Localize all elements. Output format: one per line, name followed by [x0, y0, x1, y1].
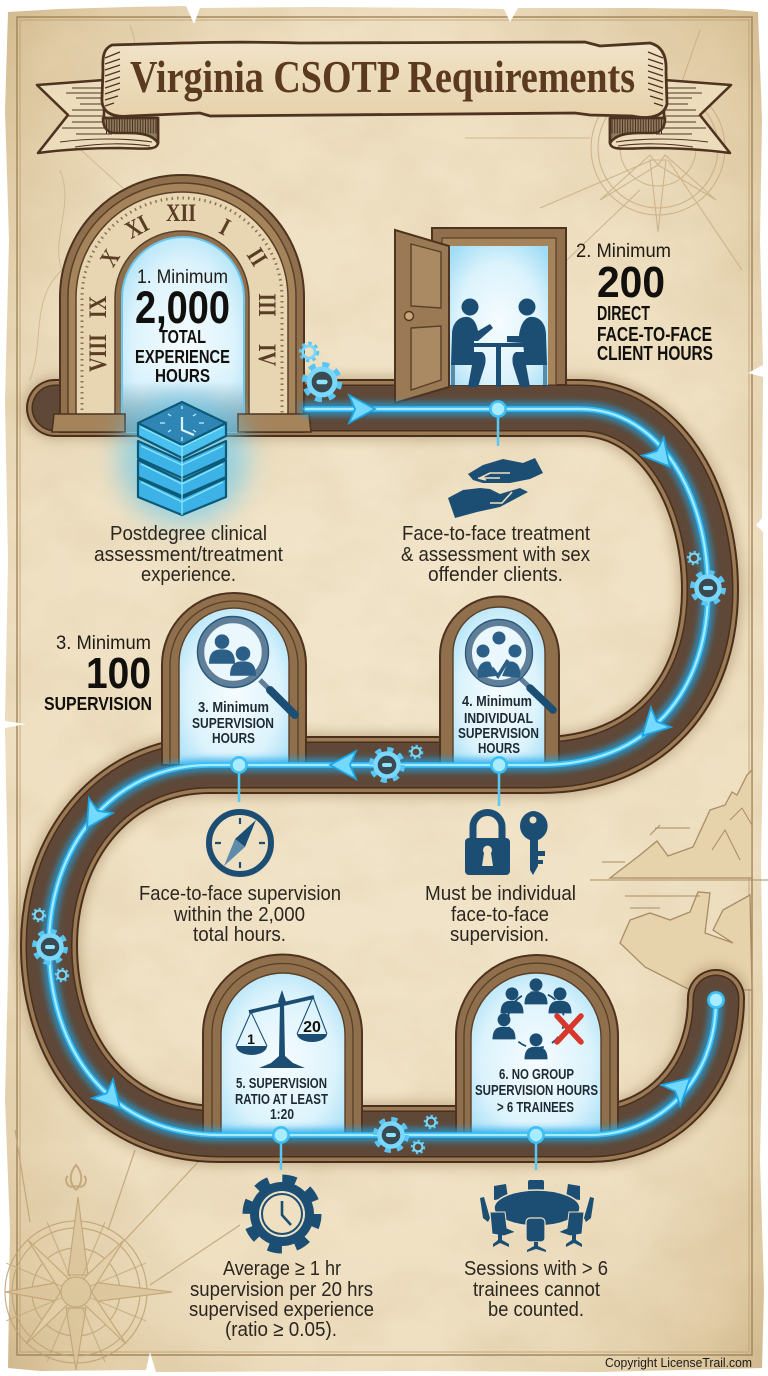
arch text: RATIO AT LEAST	[235, 1092, 328, 1108]
route gears	[33, 344, 723, 1153]
clock numerals: III	[253, 293, 281, 317]
text: face-to-face supervision: within the 2,000	[173, 903, 305, 926]
banner curl hatching	[105, 52, 663, 106]
copyright: Copyright LicenseTrail.com	[605, 1356, 752, 1370]
text: individual supervision: supervision.	[450, 923, 549, 946]
text: face-to-face treatment: Face-to-face treatment	[402, 522, 590, 545]
title: Virginia CSOTP Requirements	[130, 51, 635, 102]
arch text: SUPERVISION	[192, 716, 274, 732]
decorative compass: top right	[465, 30, 742, 305]
text: left callout 100 supervision: SUPERVISION	[44, 693, 152, 714]
arch text: HOURS	[478, 741, 520, 757]
text: individual supervision: Must be individual	[425, 882, 576, 905]
text: top right callout: FACE-TO-FACE	[597, 324, 712, 346]
clock numerals: IX	[84, 295, 112, 318]
clock numerals: X	[94, 244, 126, 271]
icon: lock and key	[465, 811, 548, 875]
text: left callout 100 supervision	[44, 633, 152, 714]
text: face-to-face supervision: Face-to-face supervision	[139, 882, 341, 905]
icon: magnifier with people	[198, 616, 295, 715]
arch text: 3. Minimum	[198, 700, 269, 716]
text: face-to-face supervision: total hours.	[193, 923, 286, 946]
glowing window	[122, 237, 244, 432]
text: total hours: EXPERIENCE	[135, 346, 230, 367]
clock arch gate	[52, 175, 311, 524]
text: sessions limit: be counted.	[488, 1298, 584, 1321]
icon: balance scale: 20	[303, 1019, 321, 1036]
icon: conference table	[480, 1180, 594, 1252]
text: sessions limit: trainees cannot	[473, 1278, 600, 1301]
text: total hours	[135, 267, 230, 386]
icon: balance scale: 1	[247, 1031, 255, 1047]
text: average supervision: supervised experience	[189, 1298, 374, 1321]
icon: balance scale	[236, 990, 327, 1068]
icon: compass	[209, 812, 271, 874]
arch text: SUPERVISION HOURS	[475, 1083, 598, 1099]
arch text	[235, 1076, 328, 1123]
arch text: INDIVIDUAL	[464, 711, 533, 727]
icon: hands	[448, 458, 543, 518]
arch text	[458, 694, 539, 757]
route nodes and connectors	[230, 400, 725, 1170]
text: face-to-face treatment: & assessment with sex	[401, 543, 591, 566]
clock numerals: VIII	[84, 334, 112, 372]
clock numerals: XII	[166, 199, 196, 227]
banner right tail	[610, 80, 731, 153]
text: average supervision: (ratio ≥ 0.05).	[225, 1318, 337, 1341]
text: individual supervision	[425, 882, 576, 946]
title banner	[37, 42, 731, 153]
text: face-to-face supervision	[139, 882, 341, 946]
arch text	[192, 700, 274, 747]
text: total hours: HOURS	[155, 365, 210, 386]
arch text: > 6 TRAINEES	[497, 1100, 574, 1116]
banner body	[102, 42, 667, 118]
decorative map: coastline upper left	[30, 25, 135, 380]
route arrows	[75, 395, 700, 1118]
clock numerals: II	[241, 243, 273, 271]
text: top right callout: CLIENT HOURS	[597, 343, 713, 365]
plinths	[52, 414, 311, 432]
icon: gear with clock	[247, 1179, 317, 1249]
winding path road	[49, 408, 716, 1134]
clock numerals: IV	[253, 344, 281, 367]
arch text: HOURS	[212, 731, 255, 747]
arch: 3 minimum supervision hours	[162, 593, 306, 765]
text: postdegree experience: experience.	[141, 563, 236, 586]
decorative mountains and islands	[590, 770, 768, 990]
text: postdegree experience: assessment/treatment	[94, 543, 283, 566]
text: postdegree experience	[94, 522, 283, 586]
text: left callout 100 supervision: 100	[86, 649, 151, 698]
text: total hours: 1. Minimum	[137, 267, 228, 288]
text: top right callout	[576, 241, 713, 365]
text: total hours: 2,000	[135, 282, 230, 333]
glowing blue route	[49, 409, 716, 1135]
two people at table	[451, 298, 547, 387]
clock numerals: I	[215, 213, 235, 241]
arch: 4 minimum individual supervision hours	[440, 596, 559, 765]
door leaf	[395, 230, 449, 403]
text: sessions limit: Sessions with > 6	[464, 1257, 608, 1280]
text: average supervision: Average ≥ 1 hr	[223, 1257, 341, 1280]
text: left callout 100 supervision: 3. Minimum	[56, 633, 151, 654]
decorative compass: bottom left	[5, 1130, 240, 1370]
stack glow	[119, 392, 247, 524]
clock numerals: XI	[121, 209, 153, 244]
text: face-to-face treatment: offender clients.	[428, 563, 563, 586]
text: average supervision	[189, 1257, 374, 1341]
arch text: SUPERVISION	[458, 726, 539, 742]
text: average supervision: supervision per 20 hrs	[190, 1278, 373, 1301]
arch text: 5. SUPERVISION	[236, 1076, 327, 1092]
arch text	[475, 1067, 598, 1116]
text: top right callout: 200	[597, 258, 665, 307]
text: top right callout: 2. Minimum	[576, 241, 671, 262]
arch text: 4. Minimum	[462, 694, 532, 710]
banner left tail	[37, 80, 158, 153]
door knob	[404, 312, 414, 320]
arch text: 6. NO GROUP	[499, 1067, 574, 1083]
text: top right callout: DIRECT	[597, 303, 650, 325]
icon: group circle with red X	[492, 978, 581, 1059]
door	[395, 228, 566, 403]
arch text: 1:20	[270, 1107, 294, 1123]
text: sessions limit	[464, 1257, 608, 1321]
text: face-to-face treatment	[401, 522, 591, 586]
text: individual supervision: face-to-face	[451, 903, 549, 926]
arch: 5 supervision ratio	[203, 954, 362, 1134]
clock numerals	[84, 199, 281, 372]
icon: glowing server stack clock	[138, 402, 226, 515]
icon: magnifier with group	[466, 620, 553, 710]
arch: 6 no group supervision	[456, 955, 618, 1134]
text: total hours: TOTAL	[159, 326, 206, 347]
text: postdegree experience: Postdegree clinical	[110, 522, 267, 545]
